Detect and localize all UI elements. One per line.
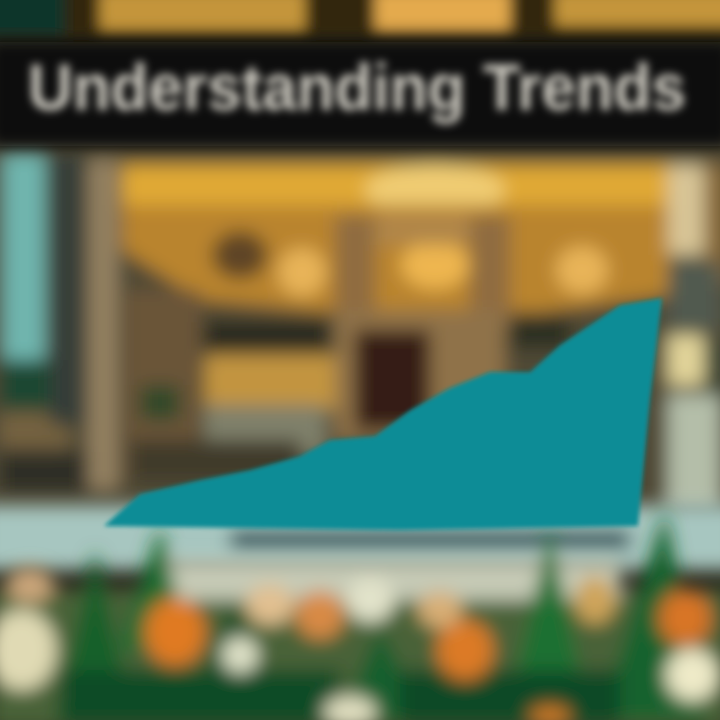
ceiling <box>122 165 672 207</box>
lower right dark band <box>510 318 570 348</box>
top strip: ceiling above the title <box>0 0 720 40</box>
fruit <box>145 598 205 666</box>
right side columns <box>668 165 704 255</box>
centre pillars and door <box>335 310 505 440</box>
pale floor band <box>0 505 720 570</box>
plants and fruit foreground <box>0 510 720 720</box>
left columns <box>50 155 84 425</box>
left teal window <box>3 155 45 360</box>
lower left room <box>125 290 200 480</box>
background: store interior <box>0 140 720 520</box>
area chart <box>104 298 662 530</box>
leaves <box>55 550 135 720</box>
title band <box>0 42 720 146</box>
title: Understanding Trends <box>28 50 686 124</box>
